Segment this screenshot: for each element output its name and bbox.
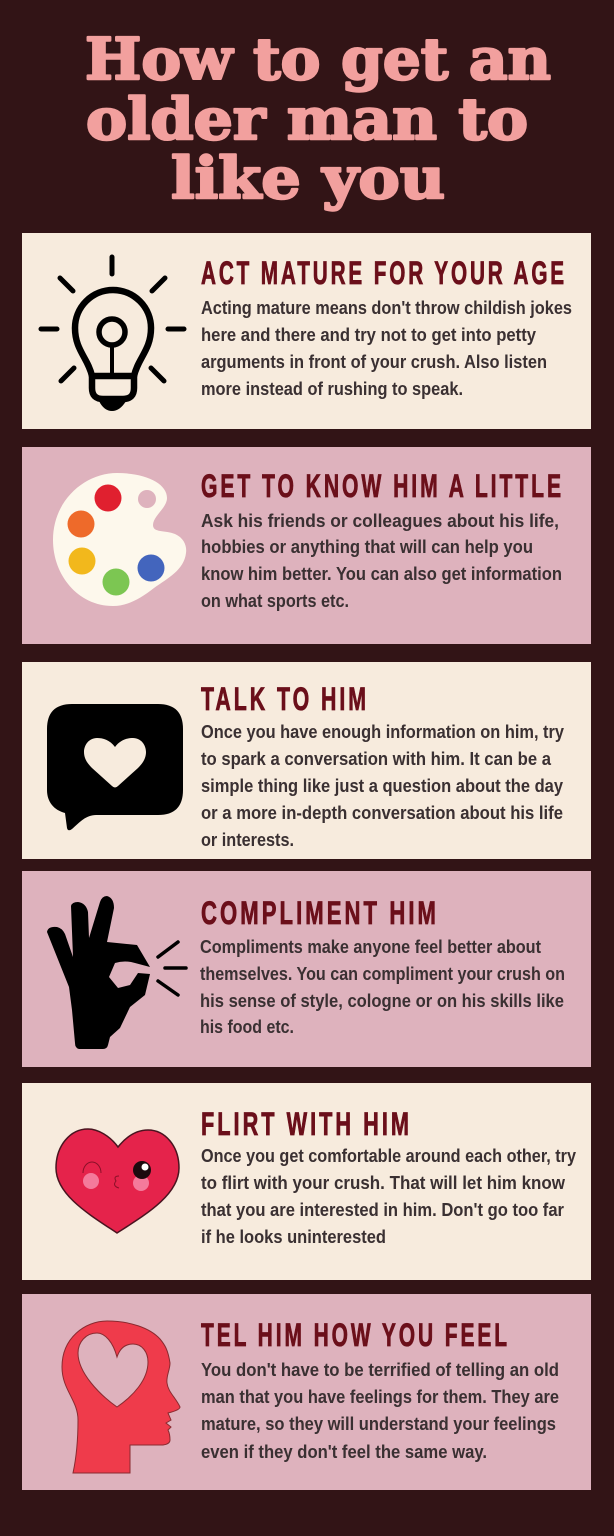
text block: that you are interested in him. Don't go too far	[201, 1199, 564, 1220]
text block	[201, 510, 562, 611]
text block: Acting mature means don't throw childish jokes	[201, 297, 572, 318]
text block: more instead of rushing to speak.	[201, 378, 463, 399]
text block: Ask his friends or colleagues about his life,	[201, 510, 559, 531]
heading: COMPLIMENT HIM	[201, 895, 439, 931]
text block: Compliments make anyone feel better about	[200, 936, 541, 957]
text block: arguments in front of your crush. Also listen	[201, 351, 547, 372]
panel: talk to him	[22, 662, 591, 859]
text block: You don't have to be terrified of telling an old	[201, 1359, 559, 1380]
text block	[201, 1359, 559, 1462]
text block: to flirt with your crush. That will let him know	[201, 1172, 566, 1193]
text block: even if they don't feel the same way.	[201, 1441, 487, 1462]
text block: man that you have feelings for them. They are	[201, 1386, 559, 1407]
title: How to get an	[85, 26, 551, 93]
text block	[201, 721, 565, 850]
text block: or interests.	[201, 829, 294, 850]
icon: speech bubble with heart	[47, 704, 183, 830]
text block: here and there and try not to get into petty	[201, 324, 537, 345]
panel: get to know him	[22, 447, 591, 644]
text block: to spark a conversation with him. It can be a	[201, 748, 552, 769]
panel: act mature	[22, 233, 591, 429]
text block: simple thing like just a question about the day	[201, 775, 564, 796]
icon: winking heart	[56, 1129, 179, 1233]
icon: light bulb	[41, 257, 184, 411]
icon: OK hand gesture	[47, 896, 186, 1049]
panel: compliment him	[22, 871, 591, 1067]
text block: hobbies or anything that will can help you	[201, 536, 533, 557]
text block: know him better. You can also get information	[201, 563, 562, 584]
panel: tell him how you feel	[22, 1294, 591, 1490]
title	[85, 26, 551, 212]
heading: TALK TO HIM	[201, 681, 369, 717]
text block: his food etc.	[200, 1016, 294, 1037]
text block: Once you have enough information on him, try	[201, 721, 565, 742]
panel: flirt with him	[22, 1083, 591, 1280]
text block: on what sports etc.	[201, 590, 349, 611]
icon: head with heart	[62, 1321, 180, 1473]
text block: mature, so they will understand your feelings	[201, 1413, 556, 1434]
icon: paint palette	[53, 473, 186, 606]
title: like you	[171, 145, 445, 212]
title: older man to	[86, 86, 528, 153]
text block	[201, 1145, 577, 1247]
text block: if he looks uninterested	[201, 1226, 386, 1247]
text block: or a more in-depth conversation about his life	[201, 802, 563, 823]
heading: FLIRT WITH HIM	[201, 1106, 412, 1142]
text block: themselves. You can compliment your crush on	[200, 963, 565, 984]
text block	[200, 936, 565, 1037]
text block	[201, 297, 572, 399]
text block: his sense of style, cologne or on his skills like	[200, 990, 564, 1011]
